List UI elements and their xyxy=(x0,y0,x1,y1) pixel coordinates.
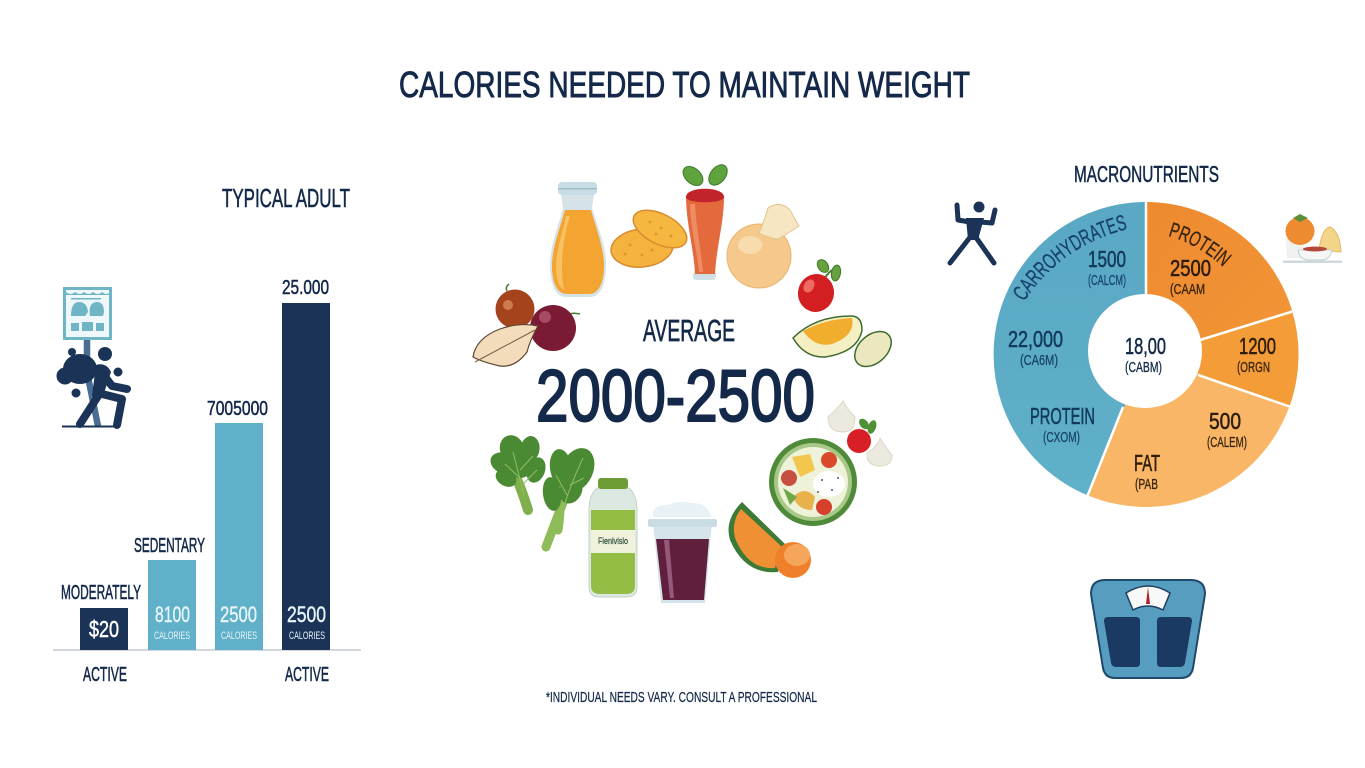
panel: average calories food ring xyxy=(473,161,898,603)
icon: green juice bottle xyxy=(589,478,637,597)
icon: melon wedge xyxy=(728,502,811,578)
donut labels: (CXOM) xyxy=(1043,429,1080,446)
donut slice: fat xyxy=(1088,354,1289,507)
donut labels: PROTEIN xyxy=(1169,222,1232,266)
icon: orange melon half xyxy=(793,316,862,357)
donut labels: (CALEM) xyxy=(1207,434,1247,451)
icon: exercising person xyxy=(950,202,995,263)
panel: macronutrients donut chart xyxy=(948,161,1342,507)
donut labels: FAT xyxy=(1134,450,1160,476)
bar: third activity level xyxy=(207,398,268,650)
heading: macronutrients: MACRONUTRIENTS xyxy=(1074,161,1219,187)
title: CALORIES NEEDED TO MAINTAIN WEIGHT xyxy=(399,64,970,105)
icon: juice jar xyxy=(550,182,606,297)
icon: red apple xyxy=(794,257,842,316)
donut slice: middle orange xyxy=(1146,312,1299,406)
bar: moderately: $20 xyxy=(89,616,119,642)
icon: crackers xyxy=(609,202,693,270)
bar: third activity level: CALORIES xyxy=(221,630,257,642)
bar: active: 25.000 xyxy=(282,277,329,299)
bar: active: CALORIES xyxy=(289,630,325,642)
donut labels: 1500 xyxy=(1088,246,1126,272)
bar: moderately: MODERATELY xyxy=(61,582,141,604)
bar: sedentary: 8100 xyxy=(155,602,190,627)
donut labels: (CAAM xyxy=(1170,281,1205,298)
heading: typical adult: TYPICAL ADULT xyxy=(222,183,350,213)
donut labels: CARROHYDRATES xyxy=(1014,215,1126,300)
donut labels: 500 xyxy=(1209,408,1241,434)
donut labels: 2500 xyxy=(1170,255,1211,281)
donut dividers and centre hole xyxy=(1087,200,1294,497)
icon: carrot smoothie xyxy=(679,161,731,280)
donut labels: (CABM) xyxy=(1125,359,1162,376)
icon: leafy greens xyxy=(487,432,601,547)
panel: typical adult bar chart xyxy=(53,183,361,686)
donut labels: (CA6M) xyxy=(1020,352,1058,369)
bar: sedentary xyxy=(134,535,205,650)
icon: salad plate xyxy=(769,438,857,526)
donut labels: (CALCM) xyxy=(1088,272,1126,289)
axis label: active left: ACTIVE xyxy=(83,664,127,686)
icon: berry cup xyxy=(648,502,717,603)
icon: cucumber slice xyxy=(848,325,898,373)
average value: 2000-2500 xyxy=(536,356,815,437)
bar: active xyxy=(282,277,330,650)
donut labels: 1200 xyxy=(1239,333,1276,359)
bar: third activity level: 2500 xyxy=(220,602,257,627)
donut labels: (ORGN xyxy=(1237,359,1270,376)
icon: person with food sign xyxy=(56,288,127,428)
icon: round dumpling xyxy=(727,204,799,288)
axis line xyxy=(53,649,361,651)
icon: bathroom scale xyxy=(1091,580,1205,678)
donut slice: carbohydrates xyxy=(994,202,1146,496)
bar: third activity level: 7005000 xyxy=(207,398,268,420)
icon: apple plum and nut xyxy=(473,284,580,366)
donut labels: (PAB xyxy=(1135,476,1158,493)
donut labels: 22,000 xyxy=(1008,326,1063,352)
average label: AVERAGE xyxy=(643,313,735,348)
icon: garlic and tomato xyxy=(828,401,892,466)
bar: active: 2500 xyxy=(287,602,326,627)
donut slice: protein xyxy=(1146,202,1292,354)
donut labels: 18,00 xyxy=(1125,333,1166,359)
axis label: active right: ACTIVE xyxy=(285,664,329,686)
bar: moderately xyxy=(61,582,141,650)
donut labels xyxy=(1008,215,1276,493)
bar: sedentary: CALORIES xyxy=(154,630,190,642)
icon: food bowl xyxy=(1283,214,1342,263)
donut labels: PROTEIN xyxy=(1030,403,1095,429)
footnote: *INDIVIDUAL NEEDS VARY. CONSULT A PROFESSIONAL xyxy=(546,689,817,706)
bar: sedentary: SEDENTARY xyxy=(134,535,205,557)
icon: green juice bottle: Fienlvlslo xyxy=(598,536,628,546)
